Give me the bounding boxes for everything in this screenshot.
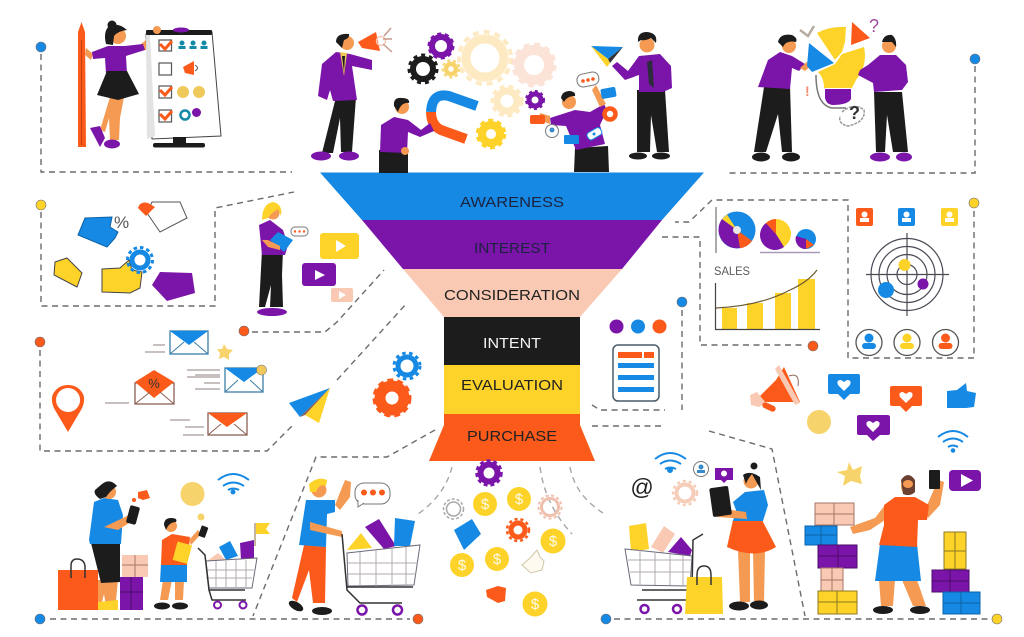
- target and audience panel: [856, 208, 958, 356]
- status dots: [610, 320, 666, 334]
- icon: pencil: [78, 22, 86, 147]
- icon: orange thumb: [486, 586, 506, 603]
- icon: blue bubble: [600, 87, 617, 99]
- woman with pencil and checklist: [78, 20, 221, 148]
- email cluster: [52, 331, 266, 435]
- icon: smile coin: [807, 410, 831, 434]
- pie 3: [796, 229, 816, 249]
- icon: gear and dot: [180, 108, 201, 120]
- flag: [255, 523, 270, 546]
- funnel stage: purchase: PURCHASE: [467, 428, 557, 445]
- dollar signs on coins: $: [531, 596, 540, 613]
- icon: thumb and dot: [132, 490, 150, 502]
- gear: small yellow: [442, 60, 460, 78]
- man pushing shopping cart: [287, 479, 420, 615]
- boy figure: [154, 518, 208, 610]
- icon: blue thumb: [78, 217, 118, 247]
- large shopping cart: [342, 518, 420, 614]
- icon: banknotes: [454, 519, 481, 550]
- icon: paper plane: [591, 46, 623, 67]
- gears near funnel: [374, 353, 420, 416]
- dollar signs on coins: $: [549, 533, 558, 550]
- woman figure: [85, 20, 146, 148]
- funnel stage: awareness: AWARENESS: [460, 194, 564, 211]
- sales label: SALES: [714, 266, 750, 278]
- funnel stage: awareness: [320, 172, 704, 220]
- icon: large paper plane: [289, 388, 330, 423]
- icon: orange gear: [604, 108, 616, 120]
- envelope: orange bottom: [208, 413, 247, 435]
- icon: purple heart bubble: [857, 415, 890, 441]
- dollar signs on coins: $: [458, 557, 467, 574]
- dollar signs on coins: $: [481, 496, 490, 513]
- icon: star: [217, 344, 233, 360]
- gear: purple: [429, 34, 453, 58]
- icon: orange heart bubble: [890, 386, 922, 412]
- light bulb: ?: [849, 103, 860, 123]
- icon: megaphone: [750, 365, 800, 413]
- envelope: blue top: [170, 331, 208, 354]
- icon: blue heart bubble: [564, 135, 579, 144]
- icon: location pin: [52, 385, 84, 432]
- icon: white hand with heart: [138, 202, 187, 232]
- speed lines: [105, 345, 220, 435]
- bars: [722, 279, 815, 329]
- icon: blue heart bubble: [828, 374, 860, 400]
- sales bar chart: [714, 266, 820, 330]
- gear: grey: [444, 499, 464, 519]
- percent symbol: %: [114, 213, 129, 232]
- gear: peach: [538, 496, 562, 518]
- funnel stage: evaluation: EVALUATION: [461, 377, 563, 394]
- stacked boxes left: [805, 503, 857, 614]
- icon: orange heart bubble: [530, 115, 545, 124]
- icon: purple thumb: [152, 272, 195, 301]
- icon: yellow play button: [320, 233, 359, 259]
- funnel stage: interest: INTEREST: [474, 240, 550, 257]
- businessman with megaphone: [311, 28, 392, 160]
- target dots: [878, 259, 928, 298]
- funnel stage: interest: [362, 220, 662, 269]
- gear: orange: [374, 380, 410, 416]
- funnel stage: consideration: [403, 269, 622, 317]
- woman with tablet and cart: [625, 453, 776, 614]
- coins: [450, 487, 566, 616]
- icon: wifi: [938, 431, 968, 452]
- icon: purple play button: [949, 470, 981, 491]
- @ symbol: @: [630, 474, 654, 500]
- icon: avatar circle: [546, 124, 558, 138]
- target rings: [866, 233, 949, 316]
- icon: magnet: [431, 95, 477, 139]
- app card with status dots: [610, 320, 666, 401]
- man figure: [850, 470, 944, 614]
- man with paper plane: [591, 32, 672, 160]
- dollar signs on coins: $: [515, 491, 524, 508]
- light bulb: !: [805, 83, 810, 99]
- two people assembling a light bulb: [752, 16, 912, 162]
- funnel stage: purchase: [429, 414, 595, 461]
- gear: blue: [394, 353, 420, 379]
- icon: white thumb: [522, 550, 544, 573]
- icon: board megaphone: [183, 61, 198, 75]
- icon: purple bubble: [715, 468, 733, 483]
- gears: [409, 32, 555, 148]
- shopping cart with parcels: [625, 523, 703, 613]
- light bulb: ?: [869, 16, 879, 36]
- pie charts: [716, 207, 820, 253]
- envelope: orange open with percent: [135, 370, 174, 404]
- icon: yellow thumb small: [54, 258, 82, 287]
- icon: blue gear: [128, 248, 152, 272]
- icon: blue thumb: [947, 383, 976, 408]
- coins and icons below funnel: [444, 460, 566, 616]
- funnel stage: consideration: CONSIDERATION: [444, 287, 580, 304]
- like panel: hands: [54, 202, 195, 301]
- funnel stage: intent: [444, 317, 580, 365]
- gear: large cream: [459, 32, 511, 84]
- dollar signs on coins: [458, 491, 558, 613]
- man juggling social icons: [526, 71, 617, 172]
- light bulb: [800, 16, 879, 126]
- gear: black: [409, 55, 437, 83]
- avatars: square: [856, 208, 958, 226]
- icon: yellow thumb big: [102, 260, 142, 293]
- envelope: orange open with percent: %: [148, 376, 160, 391]
- man figure: [287, 479, 351, 615]
- small shopping cart: [198, 523, 270, 608]
- pie 1: [718, 212, 756, 248]
- icon: wifi: [655, 453, 686, 472]
- icon: coin: [180, 482, 204, 506]
- icon: avatar: [694, 462, 708, 476]
- checklist board: [146, 26, 221, 148]
- gear: peach: [673, 481, 697, 505]
- funnel stage: evaluation: [444, 365, 580, 414]
- card: [613, 345, 659, 401]
- icon: yellow shopping bag: [685, 566, 723, 614]
- icon: wifi: [218, 474, 249, 494]
- gear: orange: [507, 519, 529, 541]
- woman figure: [89, 481, 140, 610]
- woman figure: [709, 462, 776, 610]
- trend line: [716, 270, 817, 308]
- icons: coins: [177, 86, 205, 98]
- pie 2: [760, 219, 791, 250]
- icon: speech bubble dots: [355, 483, 390, 507]
- funnel stage: intent: INTENT: [483, 335, 541, 352]
- envelope: blue right: [225, 365, 266, 392]
- social reactions cluster: [750, 365, 976, 486]
- woman and child shopping: [58, 474, 270, 610]
- gear: peach: [513, 44, 555, 86]
- man with stacked boxes: [805, 470, 981, 614]
- gear: pale yellow: [492, 86, 522, 116]
- icon: small coin: [198, 514, 204, 520]
- dollar signs on coins: $: [493, 551, 502, 568]
- avatars: round: [856, 330, 958, 356]
- icon: purple play button: [302, 263, 336, 286]
- icon: dots bubble: [586, 127, 603, 141]
- icon: orange shopping bag: [58, 559, 98, 610]
- woman: [752, 35, 818, 161]
- gear: purple: [476, 460, 502, 486]
- icon: peach play button: [331, 288, 353, 302]
- man: [858, 35, 912, 162]
- icon: star: [837, 462, 862, 486]
- man holding magnet: [379, 98, 434, 173]
- stacked boxes right: [932, 532, 980, 614]
- icon: gear purple small: [526, 91, 544, 109]
- boxes: [120, 555, 148, 610]
- gear: yellow: [477, 120, 505, 148]
- funnel: [320, 172, 704, 461]
- icon: speech bubble: [576, 71, 600, 88]
- woman with tablet and video icons: [257, 202, 359, 316]
- icons: three people: [178, 40, 208, 49]
